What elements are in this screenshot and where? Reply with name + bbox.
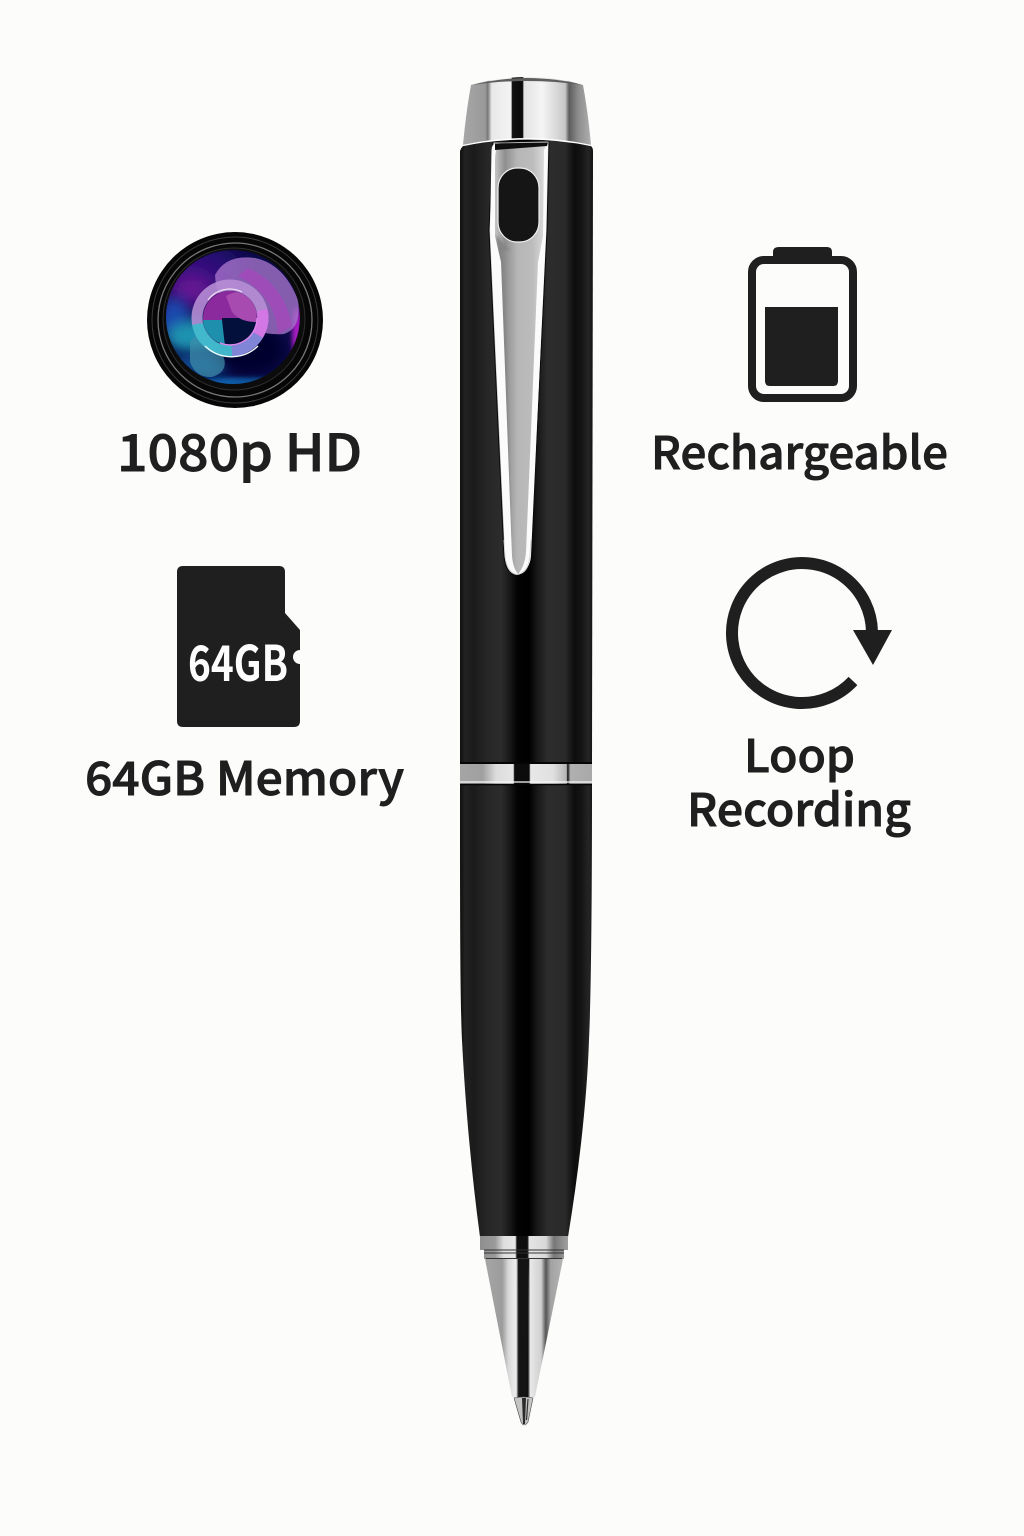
lens glass	[166, 250, 300, 384]
ring interior	[203, 291, 257, 344]
infographic canvas	[87, 77, 946, 1426]
writing tip	[514, 1397, 533, 1425]
label: Loop Recording	[687, 720, 911, 839]
pen	[460, 77, 593, 1425]
label: Loop Recording: Recording	[687, 774, 911, 839]
cone dark stripe	[518, 1259, 529, 1396]
pen barrel lower	[460, 785, 592, 1237]
lens top-right reflection	[215, 257, 299, 334]
card capacity text: 64GB	[188, 625, 288, 696]
icon: camera lens	[147, 232, 323, 408]
label: Rechargeable: Rechargeable	[651, 417, 948, 482]
chrome tip collar	[480, 1236, 568, 1259]
pocket clip with camera lens window	[489, 141, 549, 575]
label: 64GB Memory: 64GB Memory	[85, 743, 404, 809]
chrome cap	[463, 77, 591, 146]
icon: battery	[752, 247, 853, 398]
icon: loop arrow	[732, 563, 892, 703]
icon: microSD card	[177, 566, 300, 727]
camera window	[498, 168, 539, 242]
label: 1080p HD: 1080p HD	[117, 412, 362, 486]
chrome centre ring	[460, 763, 592, 784]
lens inner rings	[197, 285, 263, 357]
pen barrel upper	[460, 139, 593, 762]
label: Loop Recording: Loop	[744, 720, 855, 785]
metal cone	[485, 1259, 563, 1398]
lens lower-left reflection	[190, 335, 225, 377]
